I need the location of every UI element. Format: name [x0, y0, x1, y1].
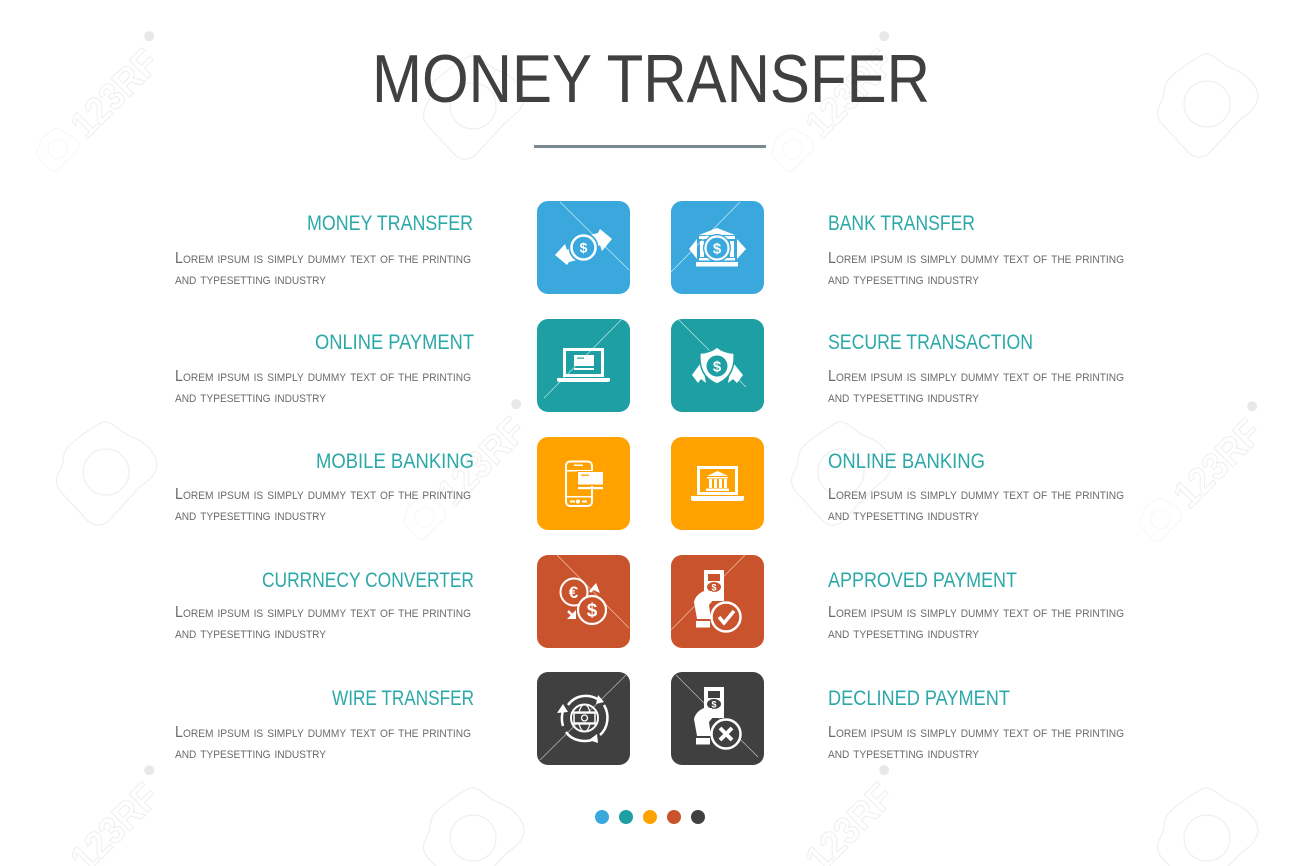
right item: secure transaction: and typesetting industry [828, 389, 980, 406]
tile: bank transfer [671, 201, 764, 294]
right item: bank transfer: BANK TRANSFER [828, 212, 975, 235]
right item: online banking [828, 450, 1124, 524]
icon: bank with coin: $ [713, 240, 722, 258]
right item: secure transaction [828, 331, 1124, 406]
icon: euro and dollar coins with arrows [560, 578, 606, 624]
left item: mobile banking: and typesetting industry [175, 507, 327, 524]
left item: mobile banking: MOBILE BANKING [316, 450, 474, 473]
left item: currency converter: and typesetting industry [175, 625, 327, 642]
left item: wire transfer: Lorem ipsum is simply dummy text of the printing [175, 724, 471, 741]
tile: online payment [537, 319, 630, 412]
icon: phone with card [566, 462, 604, 506]
right item: online banking: and typesetting industry [828, 507, 980, 524]
watermark: 123RF [63, 42, 168, 146]
icon: globe with banknote and circular arrows [557, 695, 607, 743]
left item: mobile banking [175, 450, 474, 524]
right item: declined payment: and typesetting industry [828, 745, 980, 762]
tile: approved payment [671, 555, 764, 648]
tile: secure transaction [671, 319, 764, 412]
icon: euro and dollar coins with arrows: € [569, 583, 579, 602]
icon: hand holding banknote with cross: $ [711, 700, 717, 710]
left item: online payment: and typesetting industry [175, 389, 327, 406]
left item: currency converter: CURRNECY CONVERTER [262, 569, 474, 592]
right item: declined payment: Lorem ipsum is simply dummy text of the printing [828, 724, 1124, 741]
left item: mobile banking: Lorem ipsum is simply dummy text of the printing [175, 486, 471, 503]
right item: declined payment [828, 687, 1124, 762]
title: MONEY TRANSFER [372, 41, 930, 117]
watermark: 123RF [798, 42, 903, 146]
left item: wire transfer [175, 687, 474, 762]
left item: currency converter [175, 569, 474, 642]
right item: declined payment: DECLINED PAYMENT [828, 687, 1010, 710]
icon: hand holding banknote with check: $ [711, 582, 717, 592]
icon: laptop with card [557, 350, 610, 382]
tile: wire transfer [537, 672, 630, 765]
right item: approved payment: APPROVED PAYMENT [828, 569, 1017, 592]
right item: approved payment [828, 569, 1124, 642]
right item: secure transaction: SECURE TRANSACTION [828, 331, 1033, 354]
tile: mobile banking [537, 437, 630, 530]
left item: online payment: Lorem ipsum is simply dummy text of the printing [175, 368, 471, 385]
right item: bank transfer: and typesetting industry [828, 271, 980, 288]
left item: currency converter: Lorem ipsum is simply dummy text of the printing [175, 604, 471, 621]
right item: online banking: Lorem ipsum is simply dummy text of the printing [828, 486, 1124, 503]
right item: approved payment: Lorem ipsum is simply dummy text of the printing [828, 604, 1124, 621]
icon: coin with two arrows: $ [580, 240, 588, 256]
left item: money transfer [175, 212, 473, 288]
left item: wire transfer: and typesetting industry [175, 745, 327, 762]
left item: money transfer: and typesetting industry [175, 271, 327, 288]
icon: euro and dollar coins with arrows: $ [587, 600, 598, 622]
right item: secure transaction: Lorem ipsum is simply dummy text of the printing [828, 368, 1124, 385]
watermark: 123RF [430, 410, 535, 514]
tile: money transfer [537, 201, 630, 294]
right item: approved payment: and typesetting industry [828, 625, 980, 642]
title divider [534, 145, 766, 148]
icon: shield with coin and arrows: $ [713, 358, 722, 376]
tile: currency converter [537, 555, 630, 648]
tile: declined payment [671, 672, 764, 765]
right item: online banking: ONLINE BANKING [828, 450, 985, 473]
left item: money transfer: Lorem ipsum is simply dummy text of the printing [175, 250, 471, 267]
left item: online payment: ONLINE PAYMENT [315, 331, 474, 354]
watermark: 123RF [1166, 412, 1271, 516]
icon: laptop with bank [691, 468, 744, 501]
right item: bank transfer [828, 212, 1124, 288]
pagination dots [595, 810, 705, 824]
left item: wire transfer: WIRE TRANSFER [332, 687, 474, 710]
right item: bank transfer: Lorem ipsum is simply dummy text of the printing [828, 250, 1124, 267]
left item: online payment [175, 331, 474, 406]
tile: online banking [671, 437, 764, 530]
left item: money transfer: MONEY TRANSFER [307, 212, 473, 235]
